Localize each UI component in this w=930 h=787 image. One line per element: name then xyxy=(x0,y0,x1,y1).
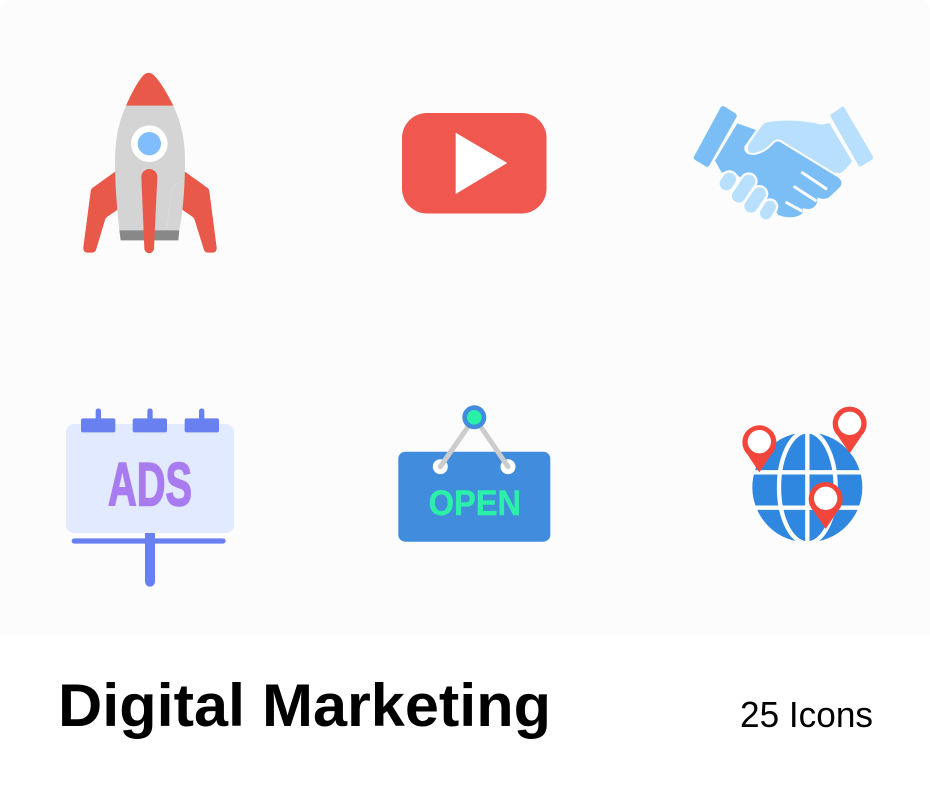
icon: globe with location pins xyxy=(742,407,867,545)
right cuff xyxy=(830,106,873,167)
hanging knob xyxy=(462,405,486,429)
sign eyelets xyxy=(433,459,516,474)
rocket window xyxy=(131,125,168,162)
icon: handshake xyxy=(694,106,873,217)
finger divider lines xyxy=(787,173,826,211)
sign label: OPEN xyxy=(429,484,521,523)
pin: upper left xyxy=(742,425,776,472)
play triangle xyxy=(456,133,507,194)
icon: rocket xyxy=(83,73,217,253)
billboard label: ADS xyxy=(108,450,192,518)
rocket body panel line xyxy=(167,181,184,229)
billboard post and crossbar xyxy=(72,532,226,587)
dark hand xyxy=(715,123,842,217)
title: Digital Marketing xyxy=(58,672,551,739)
light hand xyxy=(748,120,852,173)
billboard clips xyxy=(81,408,219,432)
pin: lower centre xyxy=(809,482,843,529)
rocket centre fin xyxy=(141,169,157,253)
sign board xyxy=(398,452,550,542)
hanging string xyxy=(440,424,508,467)
left cuff xyxy=(694,106,737,167)
icon: ADS billboard xyxy=(66,408,234,587)
globe xyxy=(748,430,867,545)
left hand fingers xyxy=(726,179,770,213)
play button background xyxy=(402,113,546,214)
rocket base band xyxy=(119,230,179,240)
rocket right fin xyxy=(181,171,217,253)
billboard panel xyxy=(66,424,234,533)
rocket nose cone xyxy=(126,73,173,106)
icon count: 25 Icons xyxy=(740,694,873,735)
rocket left fin xyxy=(83,171,119,253)
icon: video play button xyxy=(402,113,546,214)
rocket body xyxy=(115,106,185,230)
pin: upper right xyxy=(833,407,867,453)
icon: open sign xyxy=(398,405,550,542)
